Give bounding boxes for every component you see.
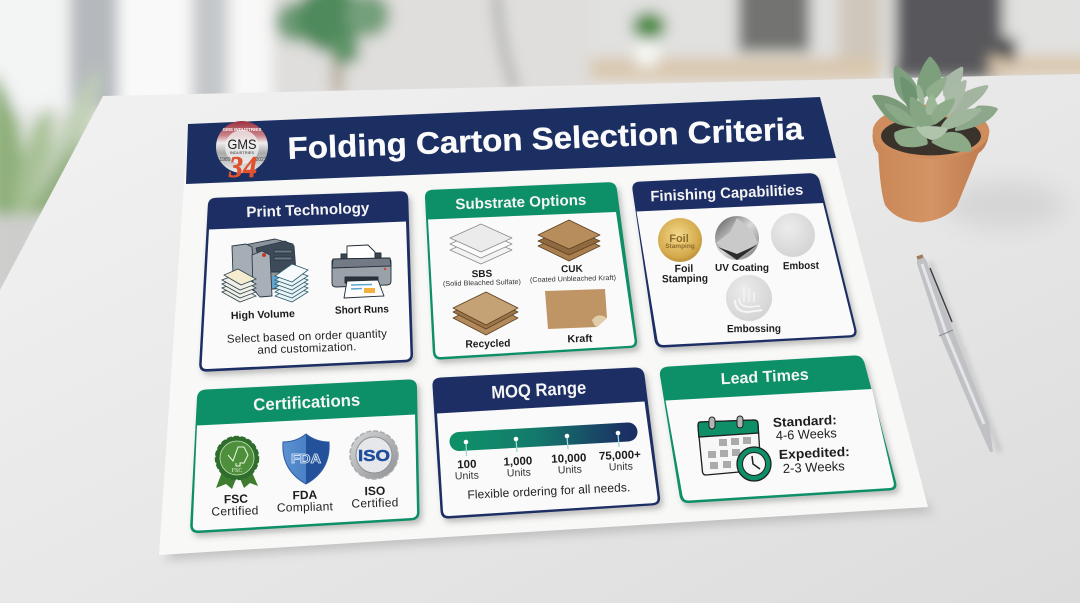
label: foil stamping bbox=[662, 263, 708, 285]
plant pot shadow bbox=[945, 181, 1065, 229]
label: ISO certified bbox=[351, 484, 399, 511]
label: ISO certified: Certified bbox=[351, 495, 399, 511]
label: 75,000+ units: Units bbox=[609, 460, 633, 474]
label: SBS: (Solid Bleached Sulfate) bbox=[443, 279, 521, 288]
label: FDA compliant: Compliant bbox=[277, 499, 334, 515]
sheet shadow bbox=[165, 480, 935, 560]
label: 10,000 units bbox=[551, 452, 587, 477]
icon: ISO seal: ISO bbox=[358, 448, 390, 465]
label: FDA compliant bbox=[277, 488, 334, 515]
label: CUK: CUK bbox=[561, 264, 584, 275]
poster sheet bbox=[159, 97, 928, 555]
panel: certifications bbox=[190, 379, 420, 533]
logo badge: INDUSTRIES bbox=[230, 150, 254, 155]
panel: finishing capabilities bbox=[632, 173, 857, 348]
text: standard lead time: 4-6 Weeks bbox=[775, 425, 838, 443]
text: expedited lead time: 2-3 Weeks bbox=[782, 458, 846, 476]
panel: print technology bbox=[199, 191, 413, 372]
icon: FSC seal: FSC bbox=[232, 468, 242, 474]
label: 75,000+ units: 75,000+ bbox=[599, 449, 641, 463]
label: CUK: (Coated Unbleached Kraft) bbox=[530, 275, 616, 284]
icon: FDA shield: FDA bbox=[291, 451, 322, 466]
label: ISO certified: ISO bbox=[364, 484, 385, 498]
text: standard lead time bbox=[772, 412, 838, 443]
text: expedited lead time bbox=[778, 444, 850, 476]
icon: ISO seal bbox=[350, 431, 398, 479]
label: CUK bbox=[530, 264, 616, 284]
label: UV coating: UV Coating bbox=[715, 262, 769, 274]
logo badge bbox=[216, 121, 268, 184]
label: 100 units: 100 bbox=[457, 459, 477, 471]
label: FSC certified bbox=[211, 492, 259, 519]
icon: printing press bbox=[232, 239, 297, 297]
label: SBS bbox=[443, 269, 521, 288]
pen bbox=[917, 256, 993, 452]
icon: FSC seal bbox=[216, 436, 258, 489]
label: embossing: Embossing bbox=[727, 323, 781, 335]
logo badge: 34 bbox=[228, 149, 257, 184]
icon: desktop printer bbox=[332, 245, 391, 298]
label: 10,000 units: 10,000 bbox=[551, 452, 587, 466]
label: foil stamping: Stamping bbox=[662, 273, 708, 285]
description: MOQ range: Flexible ordering for all needs. bbox=[467, 480, 631, 502]
icon: calendar and clock bbox=[698, 416, 771, 481]
logo badge: 1989 bbox=[219, 157, 231, 163]
label: FDA compliant: FDA bbox=[292, 488, 318, 502]
label: 100 units: Units bbox=[455, 469, 479, 483]
description: print technology bbox=[227, 328, 387, 357]
text: standard lead time: Standard: bbox=[772, 412, 837, 430]
icon: left paper stack bbox=[222, 269, 256, 302]
heading: certifications: Certifications bbox=[253, 390, 361, 415]
icon: right paper stack bbox=[275, 264, 308, 302]
heading: print technology: Print Technology bbox=[246, 200, 370, 221]
text: expedited lead time: Expedited: bbox=[778, 444, 850, 462]
icon: UV coating swatch bbox=[715, 216, 759, 260]
description: print technology: and customization. bbox=[257, 341, 357, 357]
potted succulent bbox=[873, 58, 996, 222]
icon: embost swatch bbox=[771, 213, 815, 257]
icon: kraft sheet bbox=[545, 289, 607, 329]
label: kraft: Kraft bbox=[567, 333, 593, 345]
panel: substrate options bbox=[425, 182, 637, 360]
heading: MOQ range: MOQ Range bbox=[491, 378, 587, 402]
icon: foil stamping seal: Stamping bbox=[665, 243, 695, 250]
label: SBS: SBS bbox=[472, 269, 493, 280]
title: Folding Carton Selection Criteria bbox=[287, 111, 805, 166]
icon: foil stamping seal: Foil bbox=[669, 233, 689, 245]
icon: embossing swatch bbox=[726, 275, 772, 321]
label: foil stamping: Foil bbox=[675, 263, 693, 275]
label: FSC certified: FSC bbox=[224, 492, 248, 506]
icon: FDA shield bbox=[283, 434, 329, 484]
label: high volume: High Volume bbox=[231, 308, 295, 322]
icon: SBS stack bbox=[450, 224, 512, 264]
header band bbox=[186, 97, 836, 184]
label: 10,000 units: Units bbox=[558, 463, 582, 477]
icon: foil stamping seal bbox=[658, 218, 702, 262]
label: recycled: Recycled bbox=[465, 337, 511, 351]
logo badge: 2023 bbox=[255, 157, 267, 163]
chart: MOQ range bar bbox=[459, 431, 628, 456]
panel: lead times bbox=[660, 355, 896, 503]
panel: MOQ range bbox=[432, 367, 660, 519]
logo badge: GMS INDUSTRIES bbox=[223, 127, 261, 132]
label: 1,000 units: Units bbox=[507, 466, 531, 480]
label: 100 units bbox=[455, 459, 479, 483]
label: 1,000 units bbox=[503, 455, 533, 480]
heading: finishing capabilities: Finishing Capabilities bbox=[650, 182, 804, 205]
label: 75,000+ units bbox=[599, 449, 641, 474]
label: 1,000 units: 1,000 bbox=[503, 455, 533, 469]
heading: substrate options: Substrate Options bbox=[455, 192, 587, 213]
label: embost: Embost bbox=[783, 260, 820, 272]
icon: recycled stack bbox=[453, 292, 518, 335]
pen shadow bbox=[930, 262, 1000, 452]
blurred office background bbox=[0, 0, 1080, 300]
heading: lead times: Lead Times bbox=[720, 367, 809, 388]
icon: CUK stack bbox=[538, 220, 600, 261]
label: short runs: Short Runs bbox=[335, 303, 389, 317]
description: print technology: Select based on order quantity bbox=[227, 328, 387, 346]
logo badge: GMS bbox=[228, 136, 256, 152]
label: FSC certified: Certified bbox=[211, 503, 259, 519]
